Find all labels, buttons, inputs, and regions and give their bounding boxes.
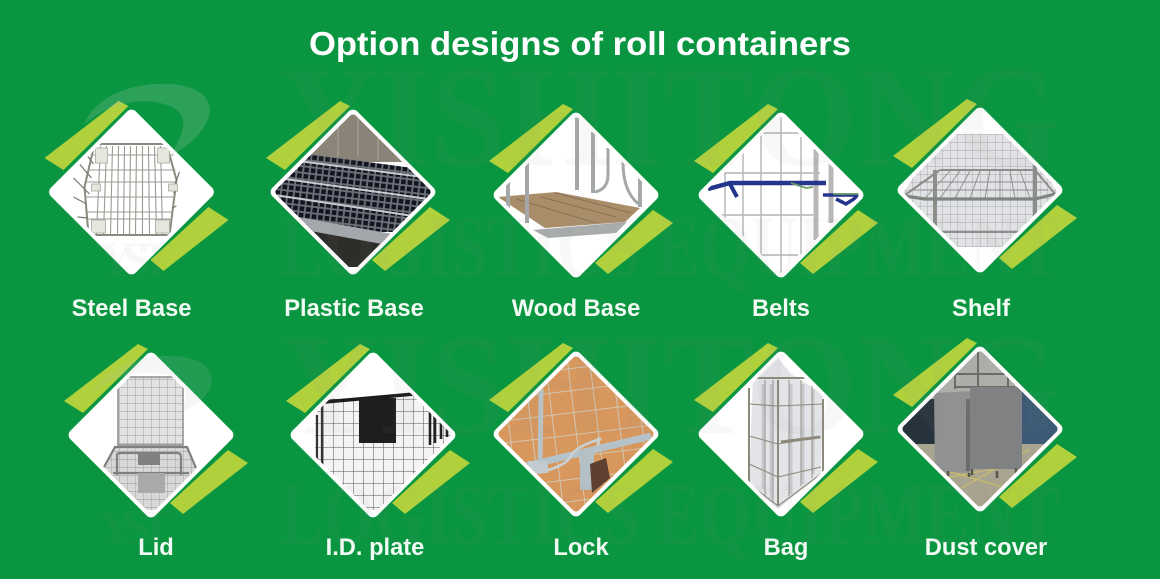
label: Lock [553,535,609,561]
watermark: short name row one: YST [98,231,173,287]
white diamond [696,349,866,519]
panel: wood base [489,104,673,322]
label: Wood Base [512,296,640,322]
label: Bag [764,535,808,561]
accent strips [893,338,1077,508]
white diamond [696,110,866,280]
watermark: company name row one: YISHITONG [280,38,1060,197]
white diamond [268,107,438,277]
photo: white bag in roll cage [749,349,823,509]
label: I.D. plate [326,535,424,561]
accent strips [64,344,248,514]
photo: mesh lid on basket [104,377,196,510]
white diamond [47,107,216,277]
panel: plastic base [263,101,450,322]
photo: hasp and padlock on mesh [498,356,654,512]
panel: dust cover [890,338,1077,561]
photo: wooden deck base [498,117,640,238]
watermark: company name row two: YISHITONG [280,306,1060,465]
white diamond [66,350,236,520]
accent strips [694,343,878,513]
accent strips [44,101,228,271]
label: Belts [752,296,810,322]
logo swoosh row one [84,84,210,156]
photo: black ID plate on mesh [315,393,453,510]
label: Dust cover [925,535,1047,561]
photo: blue belts on mesh [708,115,860,275]
panel: lid [64,344,248,561]
label: Plastic Base [284,296,424,322]
photo: shelf in mesh cage [900,134,1060,247]
panel: belts [694,104,878,322]
label: Steel Base [72,296,191,322]
label: Lid [138,535,174,561]
white diamond [491,349,661,519]
white diamond [895,344,1065,514]
watermark overlay [98,38,1060,564]
photo: steel wire base [74,144,180,235]
accent strips [694,104,878,274]
label: Shelf [952,296,1010,322]
photo: covered containers in warehouse [902,352,1058,506]
panel: I.D. plate [286,344,470,561]
accent strips [266,101,450,271]
title: Option designs of roll containers [309,25,851,62]
panel: steel base [44,101,228,322]
white diamond [288,350,458,520]
panel: lock [486,343,673,561]
accent strips [489,104,673,274]
accent strips [286,344,470,514]
panel: bag [694,343,878,561]
accent strips [489,343,673,513]
accent strips [893,99,1077,269]
logo swoosh row two [90,356,212,412]
photo: black plastic grid base [276,114,430,267]
white diamond [491,110,661,280]
white diamond [895,105,1065,275]
panel: shelf [893,99,1077,322]
watermark: short name row two: YST [98,499,173,555]
